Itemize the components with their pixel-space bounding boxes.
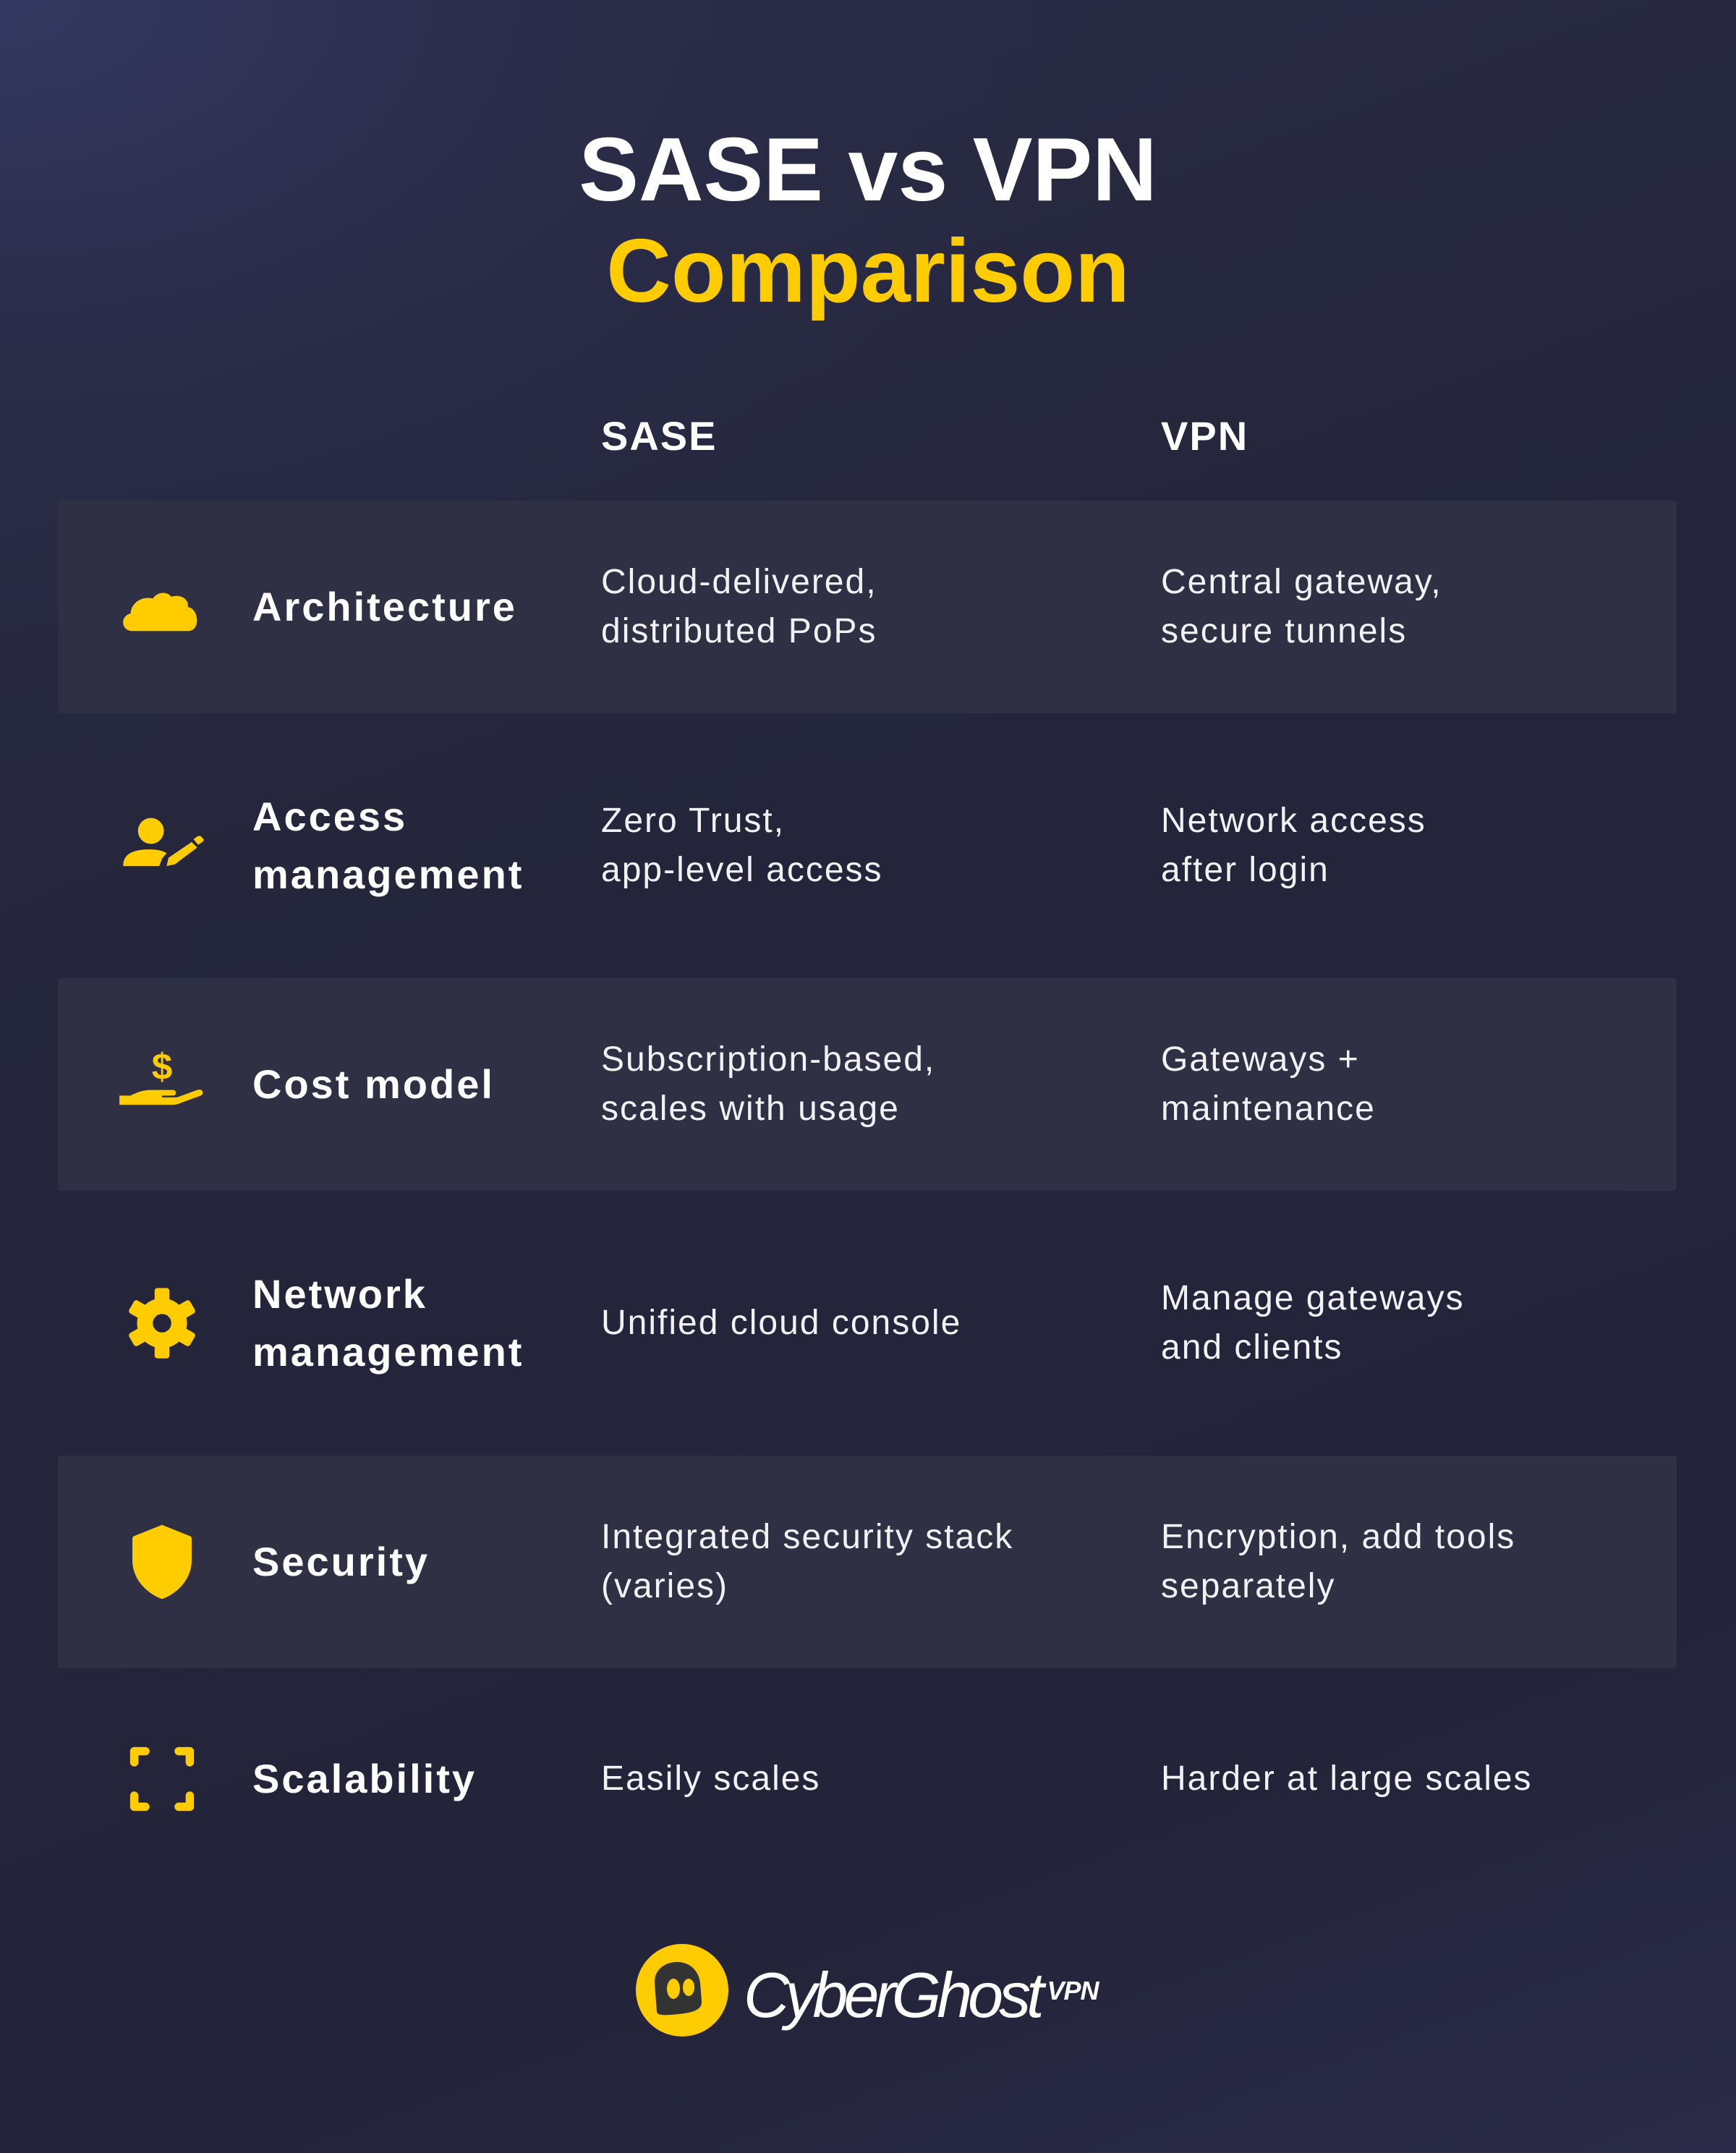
row: Architecture — [123, 563, 1442, 650]
label: Security — [252, 1539, 430, 1584]
SASE text: app-level access — [601, 851, 883, 889]
row: Network management — [129, 1271, 1465, 1375]
logo text: CyberGhost VPN — [744, 1959, 1099, 2031]
SASE text: (varies) — [601, 1567, 728, 1605]
VPN text: Harder at large scales — [1161, 1759, 1533, 1798]
VPN text: separately — [1161, 1567, 1335, 1605]
SASE text: Subscription-based, — [601, 1040, 935, 1079]
icon: cloud — [123, 593, 197, 631]
SASE text: scales with usage — [601, 1090, 900, 1128]
label: Architecture — [252, 584, 517, 629]
VPN text: Central gateway, — [1161, 563, 1442, 601]
VPN text: Manage gateways — [1161, 1279, 1465, 1317]
label: Network — [252, 1271, 427, 1317]
icon: ghost circle — [636, 1944, 728, 2037]
icon: expand corners — [130, 1746, 194, 1812]
VPN text — [1161, 563, 1442, 650]
title: SASE vs VPN — [579, 120, 1157, 220]
VPN text: maintenance — [1161, 1090, 1376, 1128]
column header: SASE: SASE — [601, 413, 718, 459]
VPN text: secure tunnels — [1161, 612, 1407, 650]
VPN text — [1161, 1518, 1515, 1605]
VPN text — [1161, 802, 1426, 889]
label: management — [252, 1329, 524, 1375]
SASE text — [601, 802, 883, 889]
SASE text: distributed PoPs — [601, 612, 877, 650]
title: Comparison — [606, 221, 1130, 321]
VPN text: Network access — [1161, 802, 1426, 840]
VPN text: and clients — [1161, 1328, 1343, 1367]
SASE text — [601, 1040, 935, 1128]
VPN text: after login — [1161, 851, 1329, 889]
VPN text — [1161, 1279, 1465, 1367]
icon: user edit — [123, 818, 204, 867]
icon: gear — [129, 1288, 195, 1359]
row: Access management — [123, 794, 1426, 897]
VPN text: Gateways + — [1161, 1040, 1360, 1079]
SASE text: Unified cloud console — [601, 1304, 961, 1342]
icon: hand with dollar: $ — [152, 1045, 172, 1087]
row: Scalability — [130, 1746, 1533, 1812]
VPN text: Encryption, add tools — [1161, 1518, 1515, 1556]
VPN text — [1161, 1040, 1376, 1128]
SASE text: Zero Trust, — [601, 802, 785, 840]
logo: CyberGhost VPN — [636, 1944, 1099, 2037]
label — [252, 1271, 524, 1375]
label: management — [252, 852, 524, 897]
SASE text: Integrated security stack — [601, 1518, 1013, 1556]
icon: hand with dollar — [119, 1045, 203, 1105]
icon: shield — [132, 1525, 192, 1599]
SASE text: Easily scales — [601, 1759, 820, 1798]
column header: VPN: VPN — [1161, 413, 1248, 459]
title — [579, 120, 1157, 321]
label — [252, 794, 524, 897]
SASE text — [601, 1518, 1013, 1605]
SASE text: Cloud-delivered, — [601, 563, 877, 601]
row: Security — [132, 1518, 1515, 1605]
label: Access — [252, 794, 407, 839]
SASE text — [601, 563, 877, 650]
label: Cost model — [252, 1061, 495, 1107]
row: Cost model — [119, 1040, 1376, 1128]
label: Scalability — [252, 1756, 477, 1801]
